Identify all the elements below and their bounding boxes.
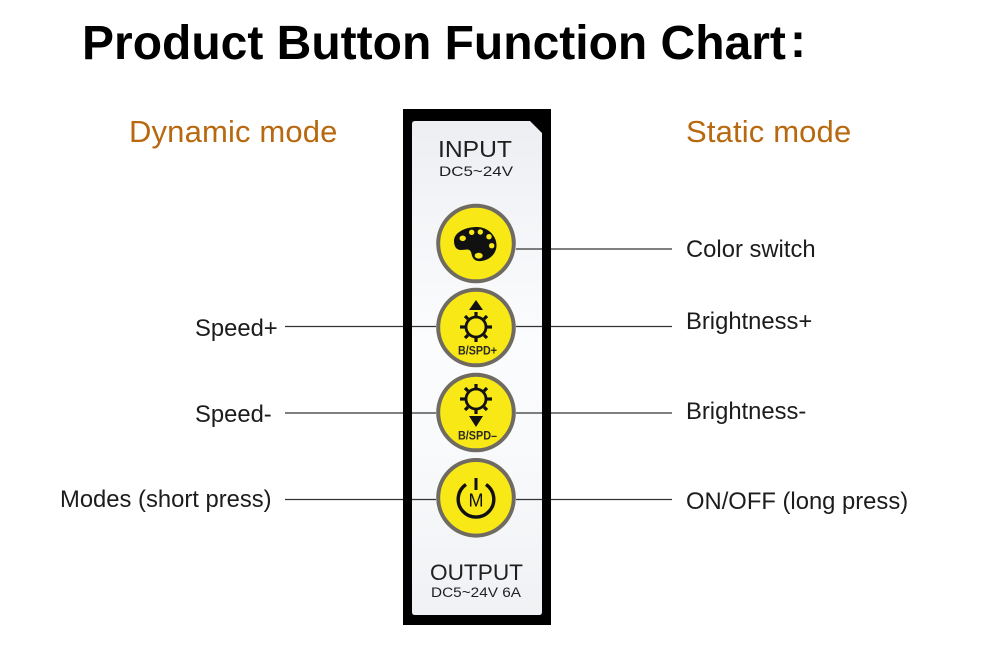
- heading: static mode: Static mode: [686, 114, 851, 149]
- output label: DC5~24V 6A: [431, 585, 521, 600]
- label: brightness minus: Brightness-: [686, 398, 806, 425]
- label: color switch: Color switch: [686, 236, 816, 263]
- button: power and mode: [438, 460, 514, 536]
- label: modes: Modes (short press): [60, 486, 272, 513]
- label: brightness plus: Brightness+: [686, 308, 812, 335]
- title colon: :: [790, 15, 806, 68]
- icon: arrow up: [469, 300, 483, 310]
- input label: [438, 136, 514, 179]
- button: brightness plus: [438, 290, 514, 365]
- connector lines: [285, 230, 672, 520]
- title: Product Button Function Chart: [82, 17, 786, 70]
- input label: DC5~24V: [439, 163, 514, 179]
- button text: M: [468, 490, 484, 510]
- icon: palette: [454, 227, 497, 261]
- label: speed minus: Speed-: [195, 401, 272, 428]
- button text: B/SPD+: [458, 344, 497, 358]
- icon: power: [458, 478, 494, 517]
- controller body: [403, 109, 551, 625]
- icon: sun: [460, 384, 492, 414]
- label: speed plus: Speed+: [195, 315, 278, 342]
- label: on/off: ON/OFF (long press): [686, 488, 908, 515]
- input label: INPUT: [438, 136, 512, 162]
- button text: B/SPD–: [458, 428, 497, 442]
- icon: sun: [460, 312, 492, 342]
- button: brightness minus: [438, 375, 514, 450]
- button: color switch: [438, 206, 514, 281]
- heading: dynamic mode: Dynamic mode: [129, 114, 338, 149]
- output label: OUTPUT: [430, 560, 523, 585]
- icon: arrow down: [469, 416, 483, 427]
- output label: [430, 560, 523, 600]
